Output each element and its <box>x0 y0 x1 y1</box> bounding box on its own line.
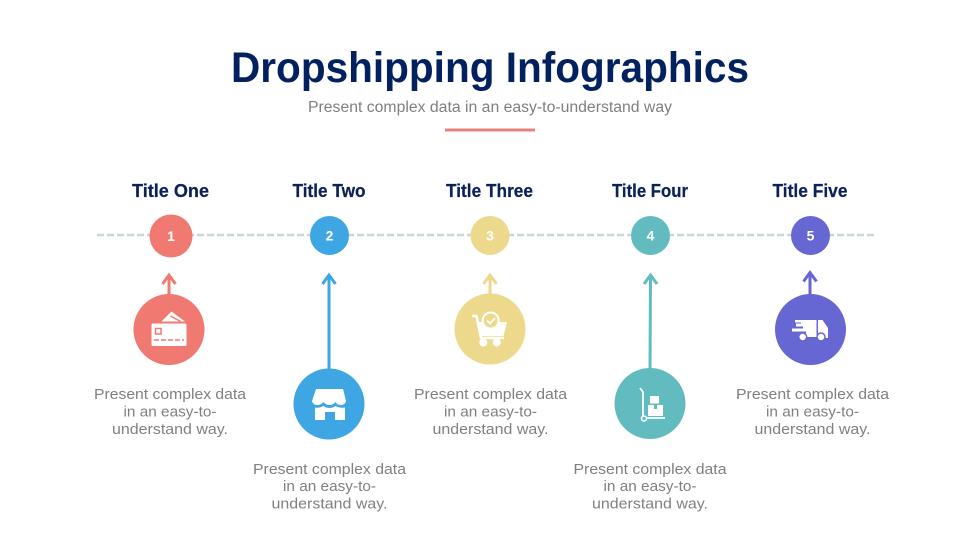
step 4 text: in an easy-to- <box>604 478 696 495</box>
step 1 icon: credit card <box>134 294 204 365</box>
title underline <box>445 128 535 132</box>
subtitle: Present complex data in an easy-to-understand way <box>308 99 672 116</box>
step 5 heading: Title Five <box>772 181 848 201</box>
step 3 heading: Title Three <box>446 181 533 201</box>
title: Dropshipping Infographics <box>231 44 749 92</box>
step 2 text: Present complex data <box>253 461 407 478</box>
step 1 text: Present complex data <box>94 386 247 403</box>
step 2 text: understand way. <box>272 496 388 512</box>
step 4 <box>574 181 727 512</box>
step 1 arrow <box>162 275 176 296</box>
step 3 number badge <box>470 216 510 255</box>
step 4 text: understand way. <box>592 496 708 512</box>
step 4 icon: hand truck with boxes <box>614 368 686 439</box>
step 5 text: in an easy-to- <box>766 404 859 420</box>
step 1 number badge: 1 <box>167 228 175 244</box>
step 5 <box>736 181 890 438</box>
step 5 number badge: 5 <box>807 228 815 244</box>
step 3 text: understand way. <box>432 421 548 438</box>
step 5 text: understand way. <box>754 421 870 438</box>
step 5 icon: delivery van <box>775 294 846 365</box>
step 3 arrow <box>484 275 496 296</box>
step 2 number badge: 2 <box>326 228 334 244</box>
step 4 number badge: 4 <box>647 228 655 244</box>
step 4 heading: Title Four <box>612 181 688 201</box>
step 1 <box>94 181 247 438</box>
step 1 number badge <box>150 214 192 258</box>
step 2 <box>253 181 407 512</box>
step 1 heading: Title One <box>132 181 209 201</box>
dashed timeline <box>97 234 875 236</box>
step 1 text: in an easy-to- <box>124 404 216 420</box>
step 4 arrow <box>644 275 657 372</box>
step 4 number badge <box>631 216 670 255</box>
step 3 text: in an easy-to- <box>444 404 537 420</box>
step 3 <box>414 181 568 438</box>
step 3 text <box>414 386 568 438</box>
step 3 icon: shopping cart <box>454 294 526 364</box>
step 3 text: Present complex data <box>414 386 568 403</box>
step 4 text: Present complex data <box>574 461 727 478</box>
step 5 number badge <box>791 216 830 255</box>
step 2 number badge <box>310 216 349 255</box>
step 5 text <box>736 386 890 438</box>
step 3 number badge: 3 <box>486 228 494 244</box>
step 5 arrow <box>804 272 816 296</box>
step 2 text <box>253 461 407 512</box>
step 4 text <box>574 461 727 512</box>
step 5 text: Present complex data <box>736 386 890 403</box>
step 2 text: in an easy-to- <box>283 478 376 495</box>
step 2 arrow <box>322 275 336 372</box>
step 1 text: understand way. <box>112 421 228 438</box>
step 1 text <box>94 386 247 438</box>
step 2 icon: storefront <box>294 368 364 440</box>
step 2 heading: Title Two <box>292 181 366 201</box>
